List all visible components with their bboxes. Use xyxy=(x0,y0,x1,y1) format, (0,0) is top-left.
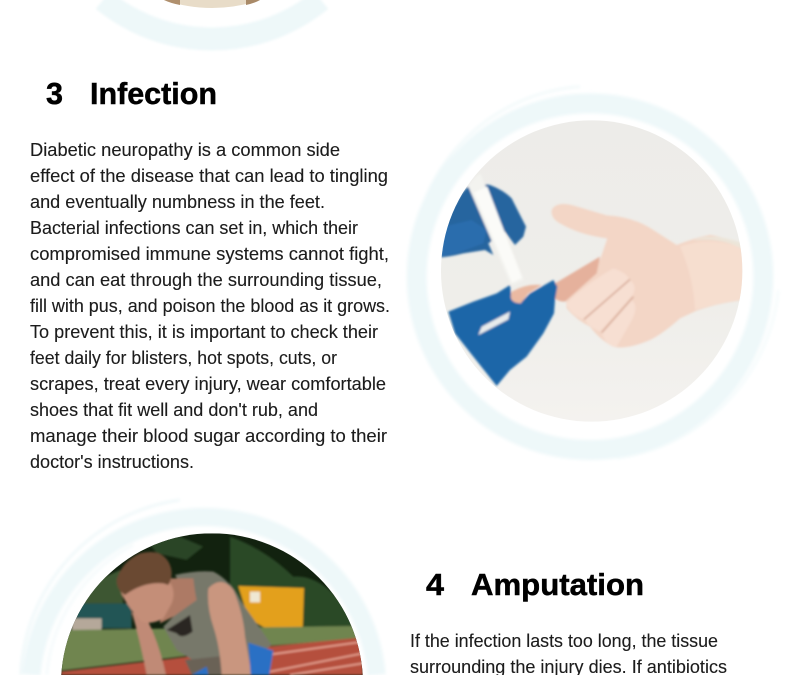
image: finger prick blood sugar test xyxy=(411,87,778,458)
lower glove xyxy=(448,280,557,386)
text block: infection description: manage their blood sugar according to their xyxy=(30,426,387,446)
fingers xyxy=(568,270,628,318)
track xyxy=(61,637,363,675)
photo xyxy=(440,119,743,423)
decorative rings xyxy=(21,500,377,675)
heading: 4 Amputation: 4 xyxy=(426,567,445,602)
text block: infection description: Diabetic neuropathy is a common side xyxy=(30,140,340,160)
photo xyxy=(61,533,363,675)
man: shoulder and arm xyxy=(208,582,252,675)
text block: infection description: shoes that fit well and don't rub, and xyxy=(30,400,318,420)
text block: infection description: fill with pus, and poison the blood as it grows. xyxy=(30,296,390,316)
text block: infection description: effect of the disease that can lead to tingling xyxy=(30,166,388,186)
man: neck and head xyxy=(160,578,197,623)
orange container xyxy=(238,586,304,633)
man: blue shorts xyxy=(248,643,273,675)
text block: infection description: To prevent this, it is important to check their xyxy=(30,322,378,342)
man: shirt xyxy=(163,571,272,667)
man: grey shorts xyxy=(184,656,222,675)
heading: 3 Infection: 3 xyxy=(46,76,63,111)
man: left arm xyxy=(132,612,166,675)
pen device xyxy=(466,181,512,287)
text block: infection description: and can eat through the surrounding tissue, xyxy=(30,270,382,290)
pinched finger xyxy=(554,257,600,302)
text block: infection description: Bacterial infections can set in, which their xyxy=(30,218,358,238)
text block: infection description: scrapes, treat every injury, wear comfortable xyxy=(30,374,386,394)
text block: infection description xyxy=(30,140,390,472)
patient hand and arm xyxy=(552,204,743,347)
text block: infection description: feet daily for blisters, hot spots, cuts, or xyxy=(30,348,337,368)
decorative rings xyxy=(411,87,778,458)
text block: amputation description: If the infection lasts too long, the tissue xyxy=(410,631,718,651)
heading: 3 Infection: Infection xyxy=(90,76,217,111)
upper glove xyxy=(441,183,526,257)
heading: 4 Amputation: Amputation xyxy=(471,567,644,602)
text block: infection description: doctor's instructions. xyxy=(30,452,194,472)
text block: infection description: and eventually numbness in the feet. xyxy=(30,192,325,212)
image: previous section photo (cropped) xyxy=(103,0,321,39)
text block: amputation description xyxy=(410,631,727,675)
grass xyxy=(61,626,363,671)
image: athlete on running track xyxy=(21,500,377,675)
text block: infection description: compromised immune systems cannot fight, xyxy=(30,244,389,264)
